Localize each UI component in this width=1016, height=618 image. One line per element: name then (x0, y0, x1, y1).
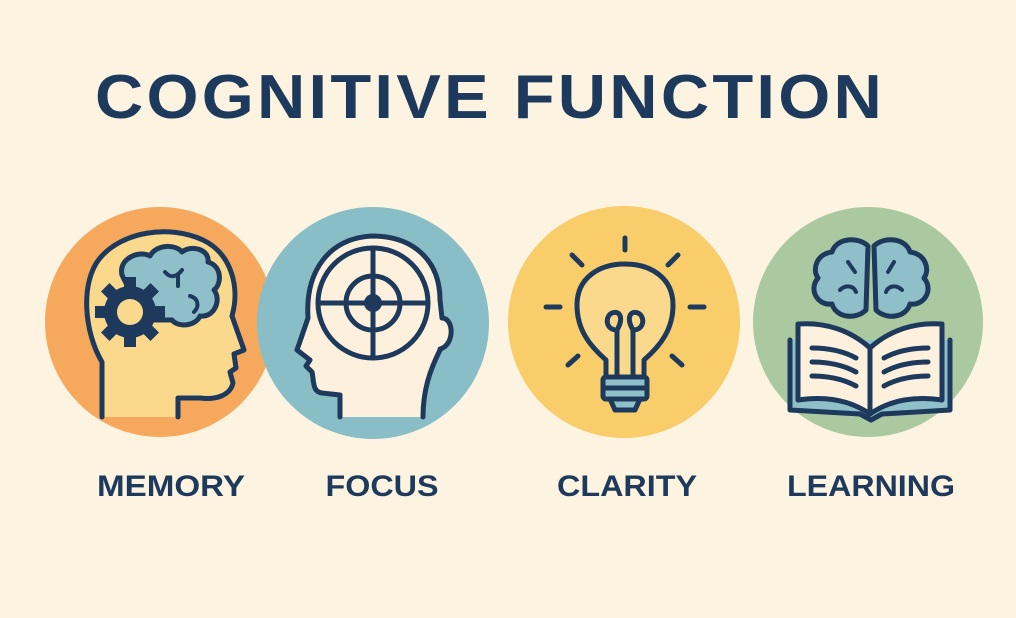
title: COGNITIVE FUNCTION (95, 63, 885, 132)
panel: focus (257, 207, 489, 439)
label: clarity: CLARITY (557, 470, 697, 503)
label: learning: LEARNING (787, 470, 955, 503)
panel: clarity (508, 206, 740, 438)
icon: light bulb (546, 238, 704, 410)
panel: memory (45, 207, 275, 437)
icon: head with target (297, 236, 451, 417)
label: memory: MEMORY (97, 470, 245, 503)
icon: brain over open book (790, 240, 950, 420)
icon: head with gear and brain (87, 232, 244, 417)
panel: learning (753, 207, 983, 437)
label: focus: FOCUS (326, 470, 438, 503)
